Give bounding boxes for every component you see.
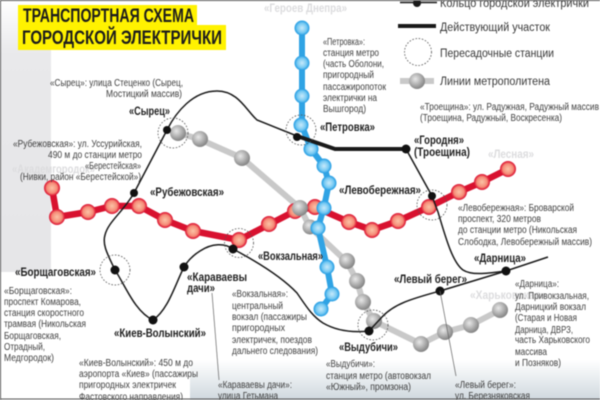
note: Vokzalnaya: вокзал (пассажиры (232, 312, 307, 323)
note: Levoberezhnaya: до станции метро (Никольская (458, 225, 577, 236)
note: Rubezhovskaya: 490 м до станции метро (48, 150, 142, 161)
metro line: red (44, 161, 516, 248)
note: Borshchagovskaya: Отрадный, (4, 342, 45, 353)
note: Vydubichi: «Выдубичи»: (326, 358, 375, 370)
note: Kiev-Volynsky: пригородных электричек (79, 380, 177, 391)
note: Syrets: «Сырец»: улица Стеценко (Сырец, (50, 78, 183, 89)
metro terminus labels (12, 3, 546, 302)
station name labels: (Троещина) (414, 147, 470, 159)
note: Syrets (50, 78, 183, 100)
station name labels (15, 106, 526, 354)
note: Darnitsa: и Позняков) (515, 358, 561, 369)
note: Levoberezhnaya: «Левобережная»: Броварской (458, 202, 574, 214)
note: Vydubichi: «Южный», промзона) (326, 382, 411, 393)
note: Kiev-Volynsky (79, 358, 198, 400)
note: Levy bereg (455, 379, 530, 400)
note: Rubezhovskaya (13, 138, 142, 183)
note: Vydubichi (326, 358, 431, 393)
station name labels: «Сырец» (129, 106, 170, 118)
note: Borshchagovskaya: трамвая (Никольская (4, 319, 86, 330)
title: ГОРОДСКОЙ ЭЛЕКТРИЧКИ (22, 27, 222, 49)
note: Kiev-Volynsky: «Киев-Волынский»: 450 м до (79, 358, 193, 369)
station name labels: «Дарница» (474, 253, 526, 265)
note: Troeshchina: (Троещина, Радужный, Воскресенка) (420, 113, 562, 124)
note: Darnitsa (515, 279, 590, 369)
station name labels: «Борщаговская» (15, 267, 96, 279)
note: Kiev-Volynsky: аэропорта «Киев» (пассажиры (79, 369, 198, 380)
note: Petrovka: (часть Оболони, (323, 58, 384, 70)
note: Rubezhovskaya: «Рубежовская»: ул. Уссурийская, (13, 138, 142, 150)
metro terminus labels: «Академгородок» (12, 164, 95, 176)
metro terminus labels: «Харьковская» (470, 290, 546, 302)
note: Vokzalnaya: пригородных (232, 323, 285, 334)
title: ТРАНСПОРТНАЯ СХЕМА (23, 6, 194, 27)
metro terminus labels: «Лесная» (488, 149, 534, 161)
station name labels: «Левый берег» (394, 274, 467, 286)
metro terminus labels: «Героев Днепра» (264, 3, 347, 15)
station name labels: «Городня» (414, 135, 464, 147)
note: Karavaevy dachi (218, 380, 292, 400)
note: Karavaevy dachi: «Караваевы дачи»: (218, 380, 292, 391)
note: Vokzalnaya: центральный (232, 301, 283, 312)
note: Petrovka: «Петровка»: (323, 37, 365, 48)
leader lines (212, 291, 456, 380)
note: Petrovka: станция метро (323, 48, 379, 59)
metro line: grey (170, 125, 508, 352)
note: Vokzalnaya (232, 289, 318, 357)
note: Vokzalnaya: дальнего следования) (232, 346, 318, 357)
note: Rubezhovskaya: «Берестейская» (85, 161, 141, 172)
legend: metro lines: Линии метрополитена (440, 76, 551, 88)
note: Levy bereg: «Левый берег»: (455, 379, 516, 391)
note: Borshchagovskaya: Медгородок) (4, 353, 54, 364)
legend: transfer stations (404, 38, 554, 66)
note: Petrovka: электрички на (323, 93, 377, 104)
note: Darnitsa: Дарницкий вокзал (515, 302, 586, 313)
note: Levoberezhnaya: проспект, 320 метров (458, 214, 541, 225)
station name labels: «Киев-Волынский» (114, 328, 206, 340)
station name labels: «Выдубичи» (339, 342, 398, 354)
title (18, 5, 226, 50)
note: Syrets: Мостицкий массив) (106, 89, 182, 100)
note: Vokzalnaya: «Вокзальная»: (232, 289, 288, 300)
metro line: blue (294, 20, 340, 316)
note: Vydubichi: станция метро (автовокзал (326, 371, 431, 382)
legend: metro lines (400, 73, 551, 89)
note: Borshchagovskaya: станция скоростного (4, 308, 84, 319)
note: Petrovka: пригородный (323, 70, 374, 81)
transfer station circles (100, 115, 447, 340)
metro station: grey interchange (292, 200, 308, 216)
note: Darnitsa: (Старая и Новая (515, 313, 577, 324)
station name labels: дачи» (187, 283, 215, 295)
note: Levoberezhnaya (458, 202, 592, 248)
legend: transfer stations: Пересадочные станции (440, 48, 554, 60)
note: Darnitsa: массива (515, 347, 547, 358)
note: Darnitsa: Дарница, ДВРЗ, (515, 325, 573, 336)
station name labels: «Петровка» (320, 122, 375, 134)
note: Borshchagovskaya: проспект Комарова, (4, 297, 81, 308)
note: Borshchagovskaya: «Борщаговская»: (4, 286, 72, 297)
note: Petrovka: Вышгород) (323, 104, 366, 115)
note: Petrovka: пассажиропоток (323, 82, 387, 93)
legend: active section: Действующий участок (440, 22, 551, 34)
note: Darnitsa: «Дарница»: (515, 279, 559, 290)
note: Rubezhovskaya: (Нивки, район «Берестейской») (20, 172, 141, 183)
station name labels: «Караваевы (187, 272, 247, 284)
note: Troeshchina (420, 102, 599, 124)
station name labels: «Левобережная» (339, 185, 421, 197)
note: Vokzalnaya: электричек, поездов (232, 335, 312, 346)
note: Borshchagovskaya: Борщаговская, (4, 331, 61, 342)
legend (398, 0, 589, 89)
city train ring line (104, 91, 548, 336)
station name labels: «Вокзальная» (258, 251, 323, 263)
station name labels: «Рубежовская» (150, 187, 224, 199)
note: Petrovka (323, 37, 387, 115)
note: Borshchagovskaya (4, 286, 86, 364)
